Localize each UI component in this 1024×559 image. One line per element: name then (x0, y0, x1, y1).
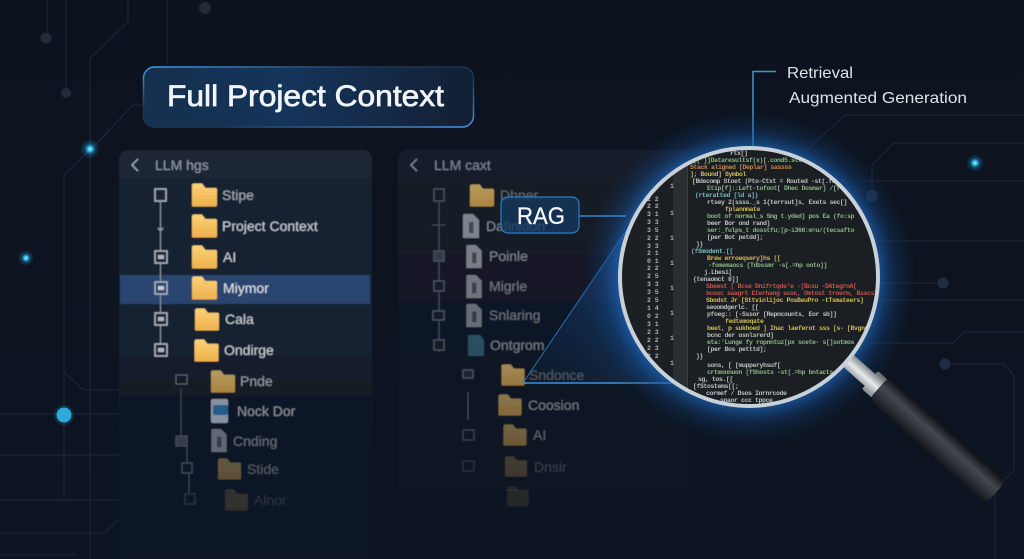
folder row: AI: AI (223, 249, 236, 265)
code text: [per Bot petdd]; (707, 234, 763, 241)
folder row: Miymor (192, 276, 269, 300)
line numbers: 0 1 (647, 258, 659, 265)
row: Migrle: Migrle (489, 278, 527, 294)
line numbers: 3 3 (647, 219, 659, 226)
folder row: AI (192, 246, 236, 269)
tree connector and toggles (155, 189, 167, 356)
folder row: Pnde (211, 370, 273, 393)
black grip (869, 377, 1006, 503)
code text: j.Lbesi[ (704, 269, 733, 276)
code text: sg, tos.[[ (698, 376, 734, 383)
line numbers: 1 (670, 310, 674, 317)
line numbers: 1 (670, 235, 674, 242)
code text: bcnc der osnlsrerd] (707, 332, 774, 339)
row: Ontgrom: Ontgrom (490, 337, 544, 353)
glowing nodes (18, 139, 984, 425)
line numbers: 1 (670, 210, 674, 217)
line numbers: 2 2 (647, 196, 659, 203)
row: Coosion (499, 394, 579, 416)
line numbers (647, 183, 674, 367)
row: Snlaring (466, 304, 540, 327)
folder row: Project Context (192, 214, 318, 238)
code text: beer Bor ond rand] (707, 220, 770, 227)
code text: ]; Bound] Symbol (690, 171, 747, 178)
line numbers: 1 (670, 335, 674, 342)
code text: }} (696, 353, 704, 360)
title (144, 67, 474, 127)
row: Sndonce (502, 364, 584, 386)
code text: beet, p sukhoed ] Ihac laeferot sss [s- [Bvgno (707, 325, 869, 332)
row: Dafinidon: Dafinidon (486, 218, 545, 234)
folder row: Stipe: Stipe (222, 187, 254, 203)
line numbers: 2 3 (647, 345, 659, 352)
code text: [[ ]]Dataresultsf(x)[.cond5.stx (693, 157, 802, 164)
magnifier handle (838, 349, 1006, 503)
line numbers: 1 4 (647, 305, 659, 312)
code text: rtx[] (730, 150, 748, 157)
code text: (fSmodent.[[ (691, 248, 734, 255)
row: Ontgrom (468, 335, 544, 356)
folder row: Miymor: Miymor (223, 280, 269, 296)
code text: spaor ccc tppce (720, 397, 773, 404)
row: faded folder (507, 486, 529, 507)
panel header: right (398, 150, 688, 178)
magnifier lens with code (620, 140, 878, 420)
folder row: Stipe (192, 184, 254, 207)
code text: fplannmate (725, 206, 761, 213)
file row: Cnding (211, 429, 277, 452)
panel header: left: LLM hgs (155, 157, 209, 173)
folder row: Project Context: Project Context (222, 218, 318, 234)
line numbers: 1 (670, 285, 674, 292)
panel: right file tree (398, 150, 688, 507)
row: AI (504, 424, 546, 446)
code text: (rteratted [ld a]) (695, 192, 758, 199)
callout: Retrieval Augmented Generation: Retrieval (787, 65, 853, 82)
code text: seoomdgerlc. [[ (706, 304, 759, 311)
line numbers: 2 2 (647, 235, 659, 242)
file row: Cnding: Cnding (233, 433, 277, 449)
code text: boot of normal_s Smg t.yded] pos Ea (fo:sp (707, 213, 855, 220)
callout: Retrieval Augmented Generation: Augmented Generation (789, 90, 967, 107)
row: Migrle (466, 275, 527, 298)
folder row: Cala: Cala (225, 311, 254, 327)
file row: Nock Dor (211, 399, 296, 423)
row: Dhner (470, 184, 538, 207)
line numbers: 2 1 (647, 250, 659, 257)
folder row: Alnor: Alnor (254, 492, 287, 508)
line numbers: 3 5 (647, 227, 659, 234)
row: Poinle: Poinle (489, 248, 528, 264)
code text: pfoeg:: [-Sssor [Repncounts, Eor sb]] (707, 311, 837, 318)
lens glow (581, 109, 917, 445)
highlighted row (120, 275, 370, 304)
folder row: Ondirge (195, 339, 274, 362)
code text: -fomemaocs [Tdbssmr -s[.=hp ooto]] (708, 262, 827, 269)
code text: Sbodst Jr [Sttvinlijoc PosBeuPro -tTsmateers] (706, 297, 864, 304)
row: Poinle (466, 245, 528, 268)
row: Dafinidon (463, 214, 545, 238)
code text: Stack aligned [Deplar] sassss (690, 164, 792, 171)
folder row: Ondirge: Ondirge (224, 342, 274, 358)
code text: ser:_fulps_t dosstfu;[p-i366:m=u/(tecsafto (707, 227, 855, 234)
line numbers: 2 3 (647, 329, 659, 336)
line numbers: 2 2 (647, 203, 659, 210)
line numbers: 1 (670, 360, 674, 367)
folder row: Stide (218, 458, 279, 480)
code text: [fStostems[[; (693, 383, 739, 390)
code text: bcosc swagrt Eterhang scoc, Omtost troerm, Bsscst (706, 290, 878, 297)
row: AI: AI (533, 427, 546, 443)
code text: }} (696, 241, 704, 248)
folder row: Alnor (225, 489, 287, 511)
row: Coosion: Coosion (528, 397, 579, 413)
title: Full Project Context (167, 80, 445, 113)
file row: Nock Dor: Nock Dor (237, 403, 296, 419)
code text: sons, [ [mupperyhsuf[ (707, 362, 781, 369)
panel header: right: LLM caxt (434, 157, 491, 173)
lens metal ring (620, 148, 878, 406)
code text: rtsey 2(ssss._s 1{terrsut]s, Exets sec[] (707, 199, 847, 206)
line numbers: 2 2 (647, 353, 659, 360)
code text: {tenaomct 8]] (693, 276, 739, 283)
magnifier beam (523, 222, 690, 383)
metal collar (840, 352, 888, 398)
code text: fedtemoqate (725, 318, 764, 325)
row: Dnsir: Dnsir (534, 459, 567, 475)
code text: eta:'Lunge fy ropnntuz[px scete- s[]sotmos (707, 339, 855, 346)
folder row: Stide: Stide (247, 461, 279, 477)
folder row: Cala (195, 308, 254, 331)
tree connector and toggles (432, 189, 474, 471)
row: Sndonce: Sndonce (529, 367, 584, 383)
code text (690, 150, 878, 404)
folder row: Pnde: Pnde (240, 373, 273, 389)
row: Dhner: Dhner (500, 187, 538, 203)
code text: Brew erroeqsery]hs [[ (707, 255, 781, 262)
line numbers: 3 1 (647, 211, 659, 218)
line numbers: 2 2 (647, 265, 659, 272)
line numbers: 1 (670, 260, 674, 267)
panel: left file tree (119, 150, 372, 559)
line numbers: 3 3 (647, 243, 659, 250)
panel header: left (119, 150, 372, 178)
row: Snlaring: Snlaring (489, 307, 540, 323)
line numbers: 3 3 (647, 281, 659, 288)
line numbers: 1 (670, 183, 674, 190)
line numbers: 3 5 (647, 289, 659, 296)
code text: crtmonnuon [fShosts -st[.=hp bntacts (707, 369, 834, 376)
line numbers: 2 5 (647, 273, 659, 280)
line numbers: 2 5 (647, 297, 659, 304)
code text: cormef / Dsos Inrnrcode (706, 390, 787, 397)
faded lower tree (176, 375, 195, 504)
code text: Etip[f]::Left-tofont[ Dhec Dosmar] /[f (707, 185, 841, 192)
line numbers: 3 1 (647, 321, 659, 328)
RAG label (501, 197, 626, 233)
callout: Retrieval Augmented Generation (753, 65, 967, 146)
line numbers: 2 2 (647, 337, 659, 344)
code text: Sbeest [ Bcse Dnifrtqde'e -[Bcsu -DAtegrnA[ (706, 283, 857, 290)
row: Dnsir (505, 456, 567, 477)
RAG label: RAG (517, 203, 565, 230)
code text: [Bdecomp Stoet (Pto-Ctxt = Routed -st[.fd (692, 178, 836, 185)
line numbers: 0 2 (647, 313, 659, 320)
code text: [per Bos petttd]; (707, 346, 767, 353)
